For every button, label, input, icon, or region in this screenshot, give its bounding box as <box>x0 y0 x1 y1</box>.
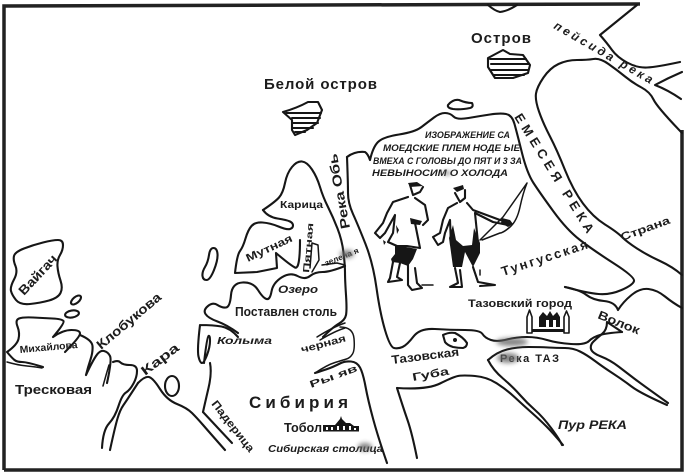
label: Laderitsa: Падерица <box>209 398 257 456</box>
label: Vaigach: Вайгач <box>15 251 60 298</box>
label: Enisei river: ЕМЕСЕЯ РЕКА <box>511 111 598 236</box>
icon: bow <box>480 183 527 240</box>
label: Trekovaya: Тресковая <box>15 382 92 397</box>
label: Tazovskaya: Тазовская <box>391 345 460 367</box>
label: Ostrov: Остров <box>471 30 531 47</box>
rivers: Taz and Pur <box>488 347 667 445</box>
figure: right man with bow <box>433 183 527 287</box>
label: Kolyma: Колыма <box>217 336 273 347</box>
label: Mutnaya: Мутная <box>244 233 295 265</box>
label: Mikhailova: Михайлова <box>19 340 78 356</box>
label: Reka Taz: Река ТАЗ <box>500 353 559 365</box>
text block: caption: ИЗОБРАЖЕНИЕ СА <box>425 130 510 140</box>
long island and Kolyma coast <box>198 248 345 363</box>
peninsula: Karitsa and Mutnaya <box>235 161 360 337</box>
bay: Tazovskaya guba <box>391 333 563 458</box>
label: Tungusskaya: Тунгусская <box>499 237 590 279</box>
river: Enisei right bank and Peisida <box>511 5 682 275</box>
label: Reka Ob: Река Обь <box>325 153 353 230</box>
icon: Tobol town <box>323 416 359 432</box>
label: Kara: Кара <box>138 339 183 378</box>
text block: caption: НЕВЫНОСИМ О ХОЛОДА <box>372 168 508 178</box>
town: Tazovsky gorod <box>468 298 572 333</box>
label: Karitsa: Карица <box>280 200 324 211</box>
island: Ostrov <box>471 30 531 78</box>
label: Klobukova: Клобукова <box>93 289 165 352</box>
town: Tobol: Тобол <box>284 420 322 435</box>
label: green river: зелена я <box>323 246 360 268</box>
town: Tazovsky gorod: Тазовский город <box>468 298 572 310</box>
label: Strana: Страна <box>619 214 673 244</box>
text block: caption: МОЕДСКИЕ ПЛЕМ НОДЕ ЫЕ <box>383 143 521 153</box>
label: Ozero: Озеро <box>278 284 318 296</box>
label: Chernaya: черная <box>300 333 347 356</box>
scan smudges <box>340 171 528 451</box>
river: Ob banks and Tungus coast <box>325 113 682 403</box>
label: Volok: Волок <box>596 308 643 338</box>
island near Kara <box>165 376 179 396</box>
river: Laderitsa <box>138 363 257 456</box>
label: Ryyav: Ры яв <box>308 363 359 391</box>
text block: caption <box>372 130 522 178</box>
label: Pur reka: Пур РЕКА <box>558 418 627 432</box>
island: Vaigach <box>11 240 63 304</box>
coast: Klobukova <box>80 289 165 386</box>
island: Beloy <box>264 76 377 135</box>
town: Tobol <box>284 416 359 435</box>
text block: caption: ВМЕХА С ГОЛОВЫ ДО ПЯТ И 3 ЗА <box>373 156 522 166</box>
small north islands <box>448 5 517 109</box>
label: Siberian capital: Сибирская столица <box>268 443 383 455</box>
label: small vertical river: Пятная <box>301 222 315 273</box>
icon: Tazovsky fortress <box>527 310 569 333</box>
figure: left man <box>375 182 433 290</box>
label: Beloy ostrov: Белой остров <box>264 76 377 93</box>
rivers: Chernaya and Ryyav <box>300 323 387 463</box>
river: Kara <box>102 339 183 450</box>
coast: Mikhailova peninsula <box>7 317 80 368</box>
label: Postavlen stol: Поставлен столь <box>235 304 337 319</box>
small islands <box>64 294 83 319</box>
label: Sibiriya: Сибирия <box>249 393 348 412</box>
label: Guba: Губа <box>411 365 451 384</box>
label: Peisida river: пейсида река <box>552 18 656 87</box>
